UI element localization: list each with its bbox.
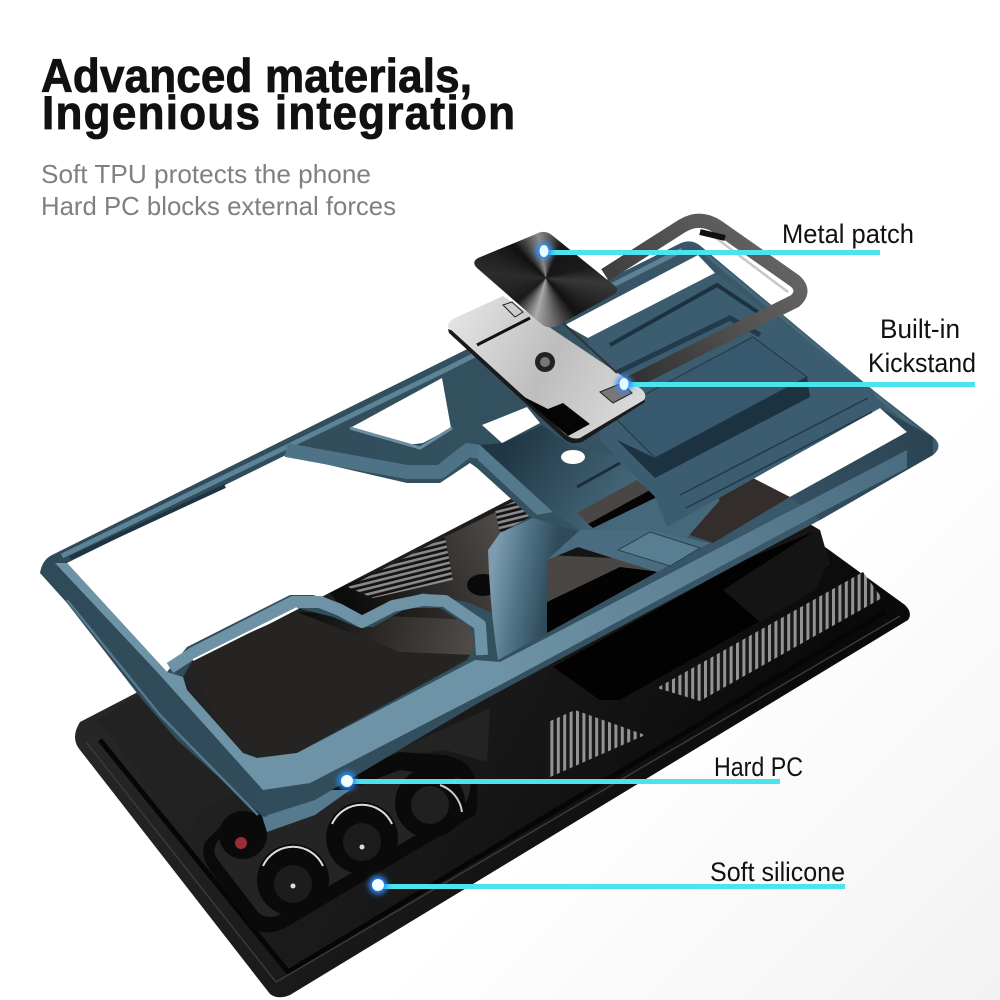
title: Advanced materials, — [41, 49, 472, 102]
screw — [535, 352, 555, 372]
carbon patch triangle — [548, 710, 645, 778]
right rail gradient — [790, 408, 933, 520]
raised square — [610, 337, 807, 458]
white sliver on camera surround — [193, 608, 297, 660]
callout: soft silicone — [369, 857, 845, 894]
raised square side — [617, 377, 810, 478]
kickstand loop — [605, 221, 800, 383]
matte back panel left — [97, 640, 300, 830]
case body — [75, 432, 910, 997]
callout: soft silicone: Soft silicone — [710, 857, 845, 887]
loop highlight — [716, 238, 788, 292]
kickstand hinge plate — [448, 296, 645, 443]
diagonal lower bar — [547, 530, 710, 572]
upper dark section — [545, 440, 830, 680]
title — [41, 49, 515, 139]
hole D black — [545, 567, 660, 640]
subtitle: Soft TPU protects the phone — [41, 159, 371, 189]
metal patch — [474, 232, 617, 328]
diagonal light bar — [478, 445, 553, 515]
callout: kickstand: Kickstand — [868, 348, 976, 378]
inner light tab — [618, 532, 700, 566]
slot brown — [660, 478, 790, 548]
carbon patch small — [495, 498, 532, 537]
black recess — [553, 532, 825, 700]
subtitle — [41, 159, 396, 221]
callout: kickstand: Built-in — [880, 314, 960, 344]
plate groove right — [563, 323, 617, 373]
black slider block — [577, 480, 657, 528]
glossy upper section — [330, 488, 550, 680]
camera cutout gloss — [297, 612, 475, 655]
lens 2 — [326, 802, 398, 874]
callout: hard PC — [338, 752, 803, 790]
top rail light — [62, 250, 682, 556]
strut upper — [286, 450, 480, 472]
lens 3 — [395, 768, 465, 838]
plate underside — [448, 329, 645, 443]
subtitle: Hard PC blocks external forces — [41, 191, 396, 221]
rail inner dark — [70, 486, 225, 558]
plate groove top — [477, 318, 530, 345]
Y member — [488, 518, 583, 660]
matte right of lenses — [375, 708, 490, 762]
right rail light — [703, 252, 930, 440]
recess right — [723, 532, 825, 622]
carbon patch lower right — [657, 572, 882, 701]
lens 1 — [257, 844, 329, 916]
pin hole — [561, 450, 585, 464]
back plate channel dark — [610, 285, 762, 345]
loop inner black — [700, 232, 725, 238]
light face left and bottom — [55, 450, 907, 790]
oval dark slot — [467, 574, 499, 596]
title: Ingenious integration — [42, 86, 515, 139]
carbon patch upper — [348, 537, 453, 598]
callout: metal patch: Metal patch — [782, 219, 914, 249]
frame dark body with cut-outs — [40, 241, 938, 817]
camera cutout matte — [187, 612, 470, 765]
wavy camera surround — [170, 600, 482, 668]
callout: kickstand — [616, 314, 976, 392]
centre dark zone — [480, 425, 720, 572]
strut highlight — [350, 428, 452, 448]
back plate outer — [588, 273, 880, 527]
tab slot bottom — [600, 383, 632, 403]
back plate channel inner — [612, 318, 760, 375]
tab slot top — [503, 302, 523, 317]
flash sensor — [219, 811, 267, 859]
case inner rim — [100, 612, 885, 972]
left dark band highlight — [67, 600, 258, 815]
black phone case — [75, 432, 910, 997]
hole D grey — [545, 555, 660, 640]
groove — [577, 463, 620, 487]
thin line — [680, 398, 872, 508]
callout: hard PC: Hard PC — [714, 752, 803, 782]
camera island — [203, 752, 478, 932]
silver plate — [448, 296, 645, 438]
black reflection — [520, 395, 590, 436]
callout: metal patch — [536, 219, 914, 259]
blue PC frame — [40, 241, 938, 832]
lower lip — [257, 790, 350, 832]
